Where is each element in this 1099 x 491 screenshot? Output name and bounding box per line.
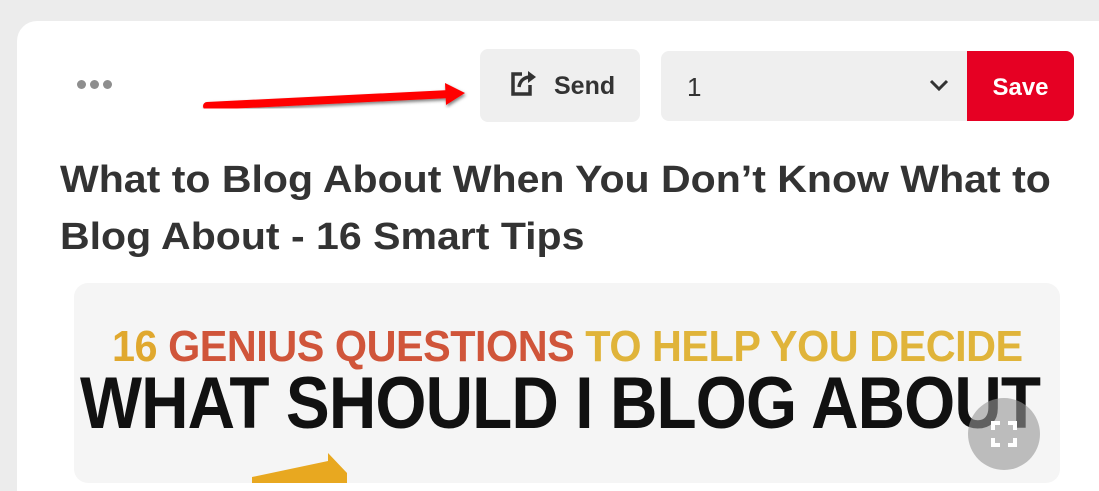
arrow: red pointing to Send [202,83,467,108]
button: Save: Save [992,74,1049,101]
button: Save [967,51,1074,121]
image: pin preview [74,283,1060,483]
title: What to Blog About When You Don’t Know What to [60,159,1051,201]
icon: orange arrow [252,453,347,483]
title: Blog About - 16 Smart Tips [60,216,584,258]
title [60,159,1051,258]
dropdown: board select: 1 [687,72,701,102]
subheading text: 16 GENIUS QUESTIONS TO HELP YOU DECIDE [112,322,1023,371]
button: Send [480,49,640,122]
icon: share [511,71,536,96]
dropdown: board select [661,51,967,121]
button: Send: Send [554,72,615,100]
icon: more dots [77,80,112,89]
main heading text: WHAT SHOULD I BLOG ABOUT [80,363,1040,444]
icon: zoom button [968,398,1040,470]
